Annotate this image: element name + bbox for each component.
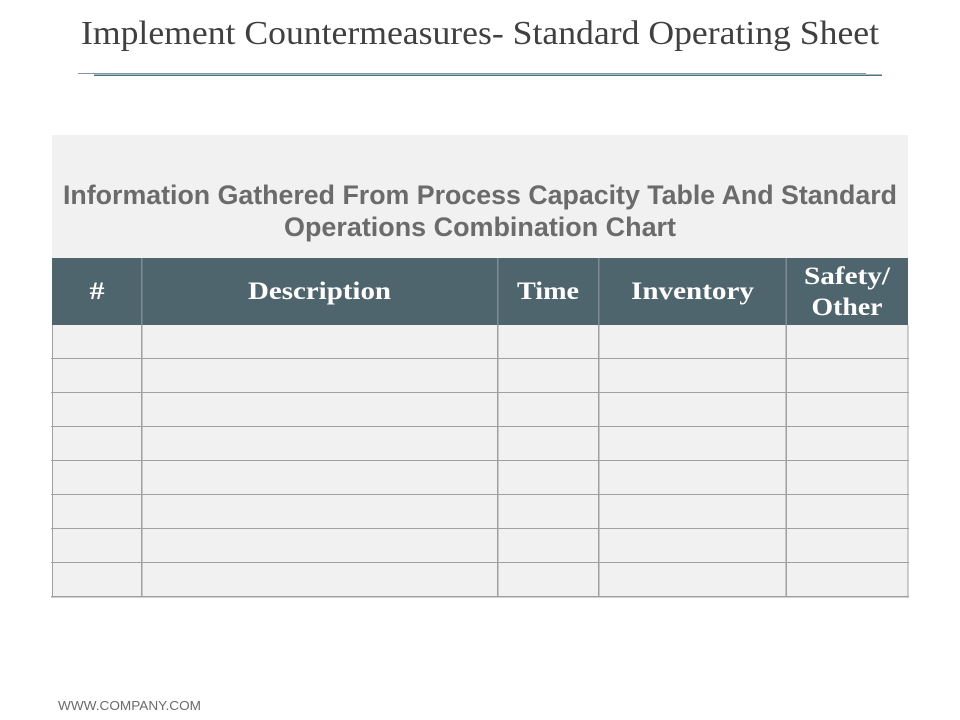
table header row: Inventory [631,278,755,305]
table header row: Safety/ [804,263,891,290]
table header row [52,258,908,325]
table body grid [51,325,909,598]
footer website text: WWW.COMPANY.COM [58,699,201,713]
title underline [78,73,882,76]
table header row: # [90,278,105,305]
table header row: Time [517,278,579,305]
title: Implement Countermeasures- Standard Operating Sheet [81,15,880,52]
table header row: Description [248,278,391,305]
panel: table heading: Operations Combination Chart [284,212,676,242]
panel: table heading: Information Gathered From Process Capacity Table And Standard [63,180,897,210]
panel: table heading [52,135,908,258]
table header row: Other [812,294,882,321]
